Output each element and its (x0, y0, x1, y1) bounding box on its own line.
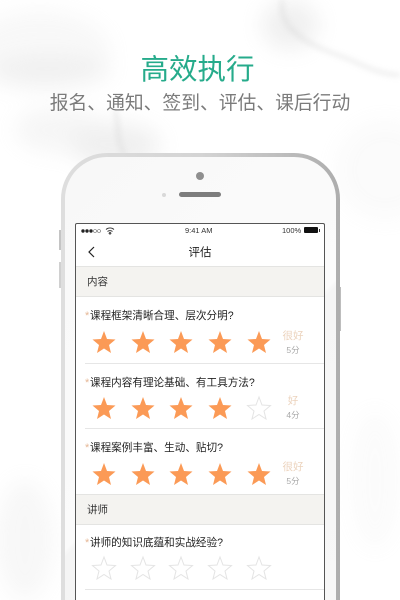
front camera (196, 172, 204, 180)
question 1: 5分 (286, 345, 300, 355)
section: 讲师 (76, 494, 324, 525)
earpiece speaker (179, 192, 221, 197)
question 1: 课程框架清晰合理、层次分明? (90, 310, 234, 322)
question 2: 课程内容有理论基础、有工具方法? (90, 377, 255, 389)
question 1: 很好 (282, 330, 304, 342)
signal dots (81, 228, 114, 235)
nav back arrow (88, 246, 94, 258)
phone body (65, 157, 336, 600)
time: 9:41 AM (185, 226, 213, 235)
question 1: * (85, 310, 89, 322)
question 2 (85, 376, 300, 420)
section: 内容: 内容 (87, 276, 108, 288)
question 1 (85, 310, 304, 355)
screen (75, 223, 325, 600)
nav title: 评估 (188, 247, 212, 259)
section: 内容 (76, 266, 324, 297)
phone frame (61, 153, 340, 600)
title: 高效执行 (140, 54, 254, 86)
question 2: 好 (288, 395, 298, 407)
divider (85, 428, 324, 429)
question 4: * (85, 537, 89, 549)
battery: 100% (282, 226, 301, 235)
section: 讲师: 讲师 (87, 504, 108, 516)
status bar (81, 226, 320, 235)
question 2: 4分 (286, 410, 300, 420)
question 4: 讲师的知识底蕴和实战经验? (90, 537, 223, 549)
divider (85, 589, 324, 590)
sensor dot (162, 193, 166, 197)
question 3: 很好 (282, 461, 304, 473)
subtitle: 报名、通知、签到、评估、课后行动 (50, 92, 350, 113)
question 4 (85, 536, 272, 580)
question 3: 课程案例丰富、生动、贴切? (90, 442, 223, 454)
question 3 (85, 442, 304, 486)
question 3: 5分 (286, 476, 300, 486)
question 2: * (85, 377, 89, 389)
question 3: * (85, 442, 89, 454)
divider (85, 363, 324, 364)
